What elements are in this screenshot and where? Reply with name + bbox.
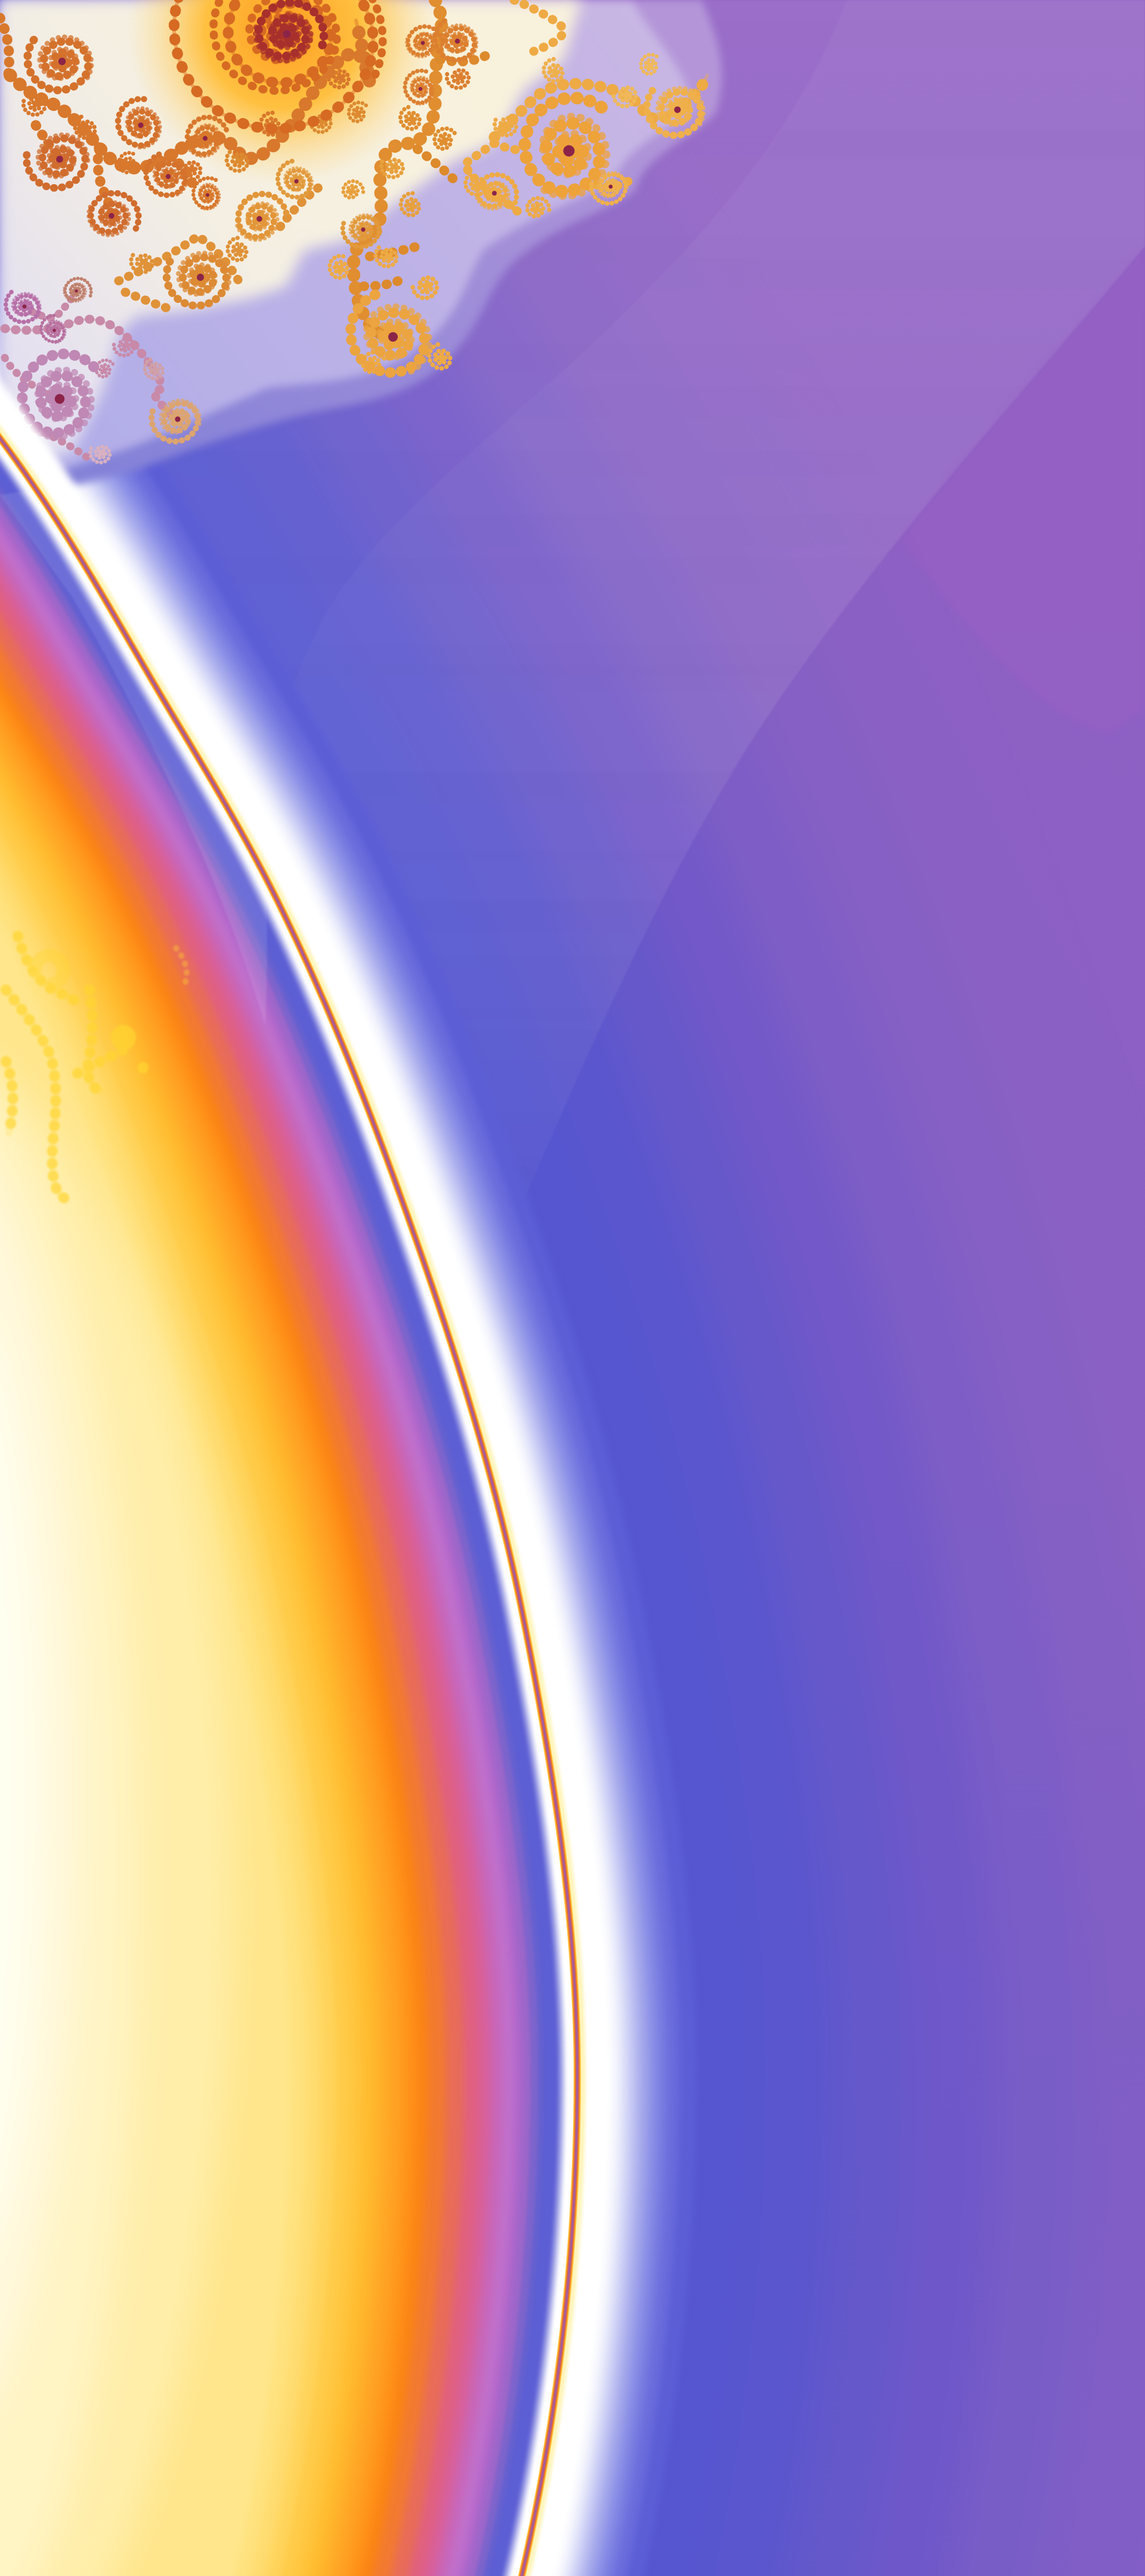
glow bands right of the curve — [0, 0, 577, 2576]
purple spirals — [0, 274, 206, 451]
orange spirals — [15, 11, 483, 318]
pale right spirals — [339, 72, 713, 388]
gold glow of large spiral — [128, 0, 438, 185]
far field bands — [0, 0, 577, 2576]
white glow around the curve — [0, 0, 577, 2576]
broad warm bands left of the curve — [0, 0, 522, 2576]
branch: lower chain — [119, 185, 322, 310]
overlay: lighter sheet near fractal — [0, 0, 1145, 1462]
overlay: second lighter sheet — [265, 0, 1145, 1306]
overlay: lighter lilac patch — [0, 489, 267, 1026]
branch: right chain — [465, 0, 707, 212]
small side twigs along the branches — [19, 51, 664, 467]
large central spiral — [137, 0, 414, 171]
fractal cream interior — [0, 0, 581, 459]
inner bands next to the curve — [0, 0, 565, 2576]
inner dark spiral — [247, 0, 333, 73]
faint yellow fractal — [6, 936, 187, 1199]
lower field tint — [0, 1431, 1145, 2576]
branch: purple chain — [5, 291, 178, 459]
fractal branches — [0, 0, 707, 459]
branch: left orange chain — [0, 18, 370, 216]
inner pale core — [0, 1014, 233, 2576]
overlay: top right blob — [900, 246, 1145, 733]
branch: centre column — [354, 0, 489, 337]
thin curve core — [0, 0, 580, 2576]
fractal halo — [0, 0, 722, 495]
